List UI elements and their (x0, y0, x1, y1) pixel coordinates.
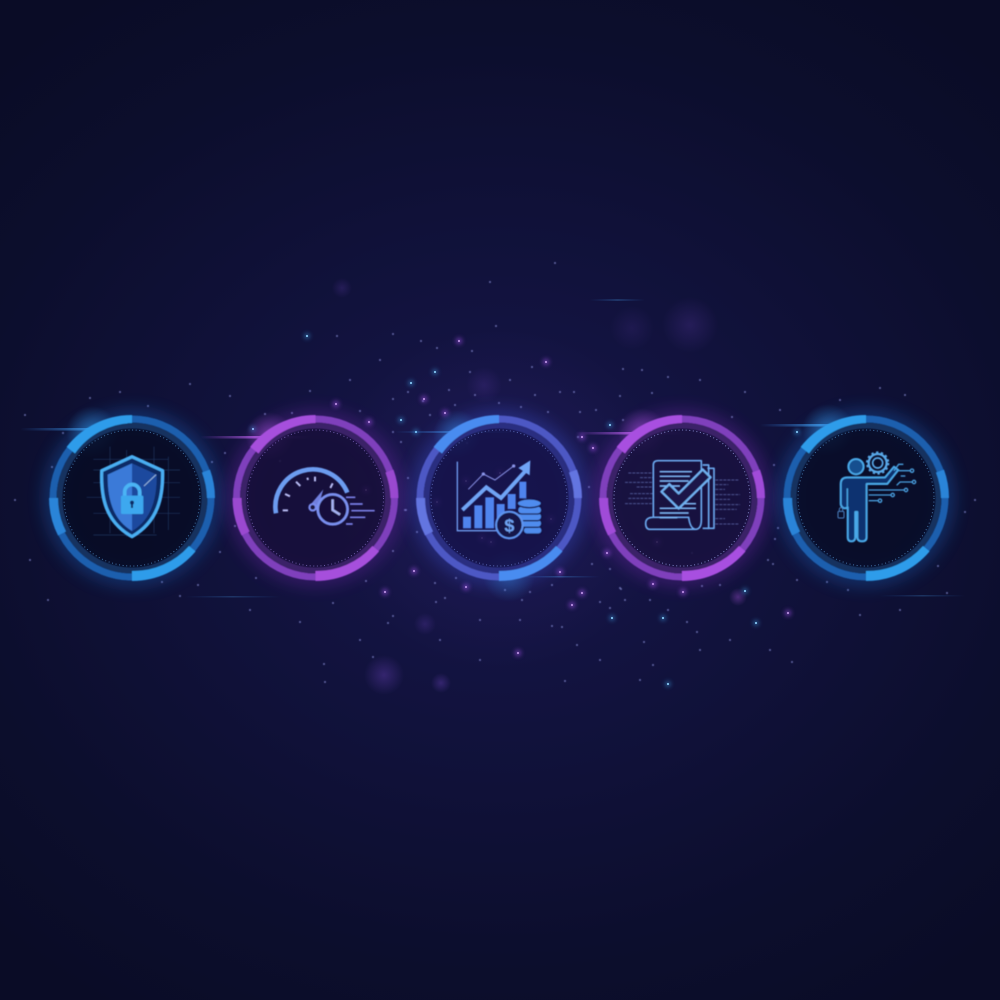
badge 1: security ring (49, 406, 215, 581)
icon: shield with padlock (87, 447, 180, 537)
icon: growth chart with coins: $ (504, 515, 514, 535)
bokeh lights (330, 278, 747, 695)
light streaks (20, 299, 965, 598)
particle field (15, 263, 975, 684)
badge 5: human oversight ring (783, 404, 949, 581)
icon: growth chart with coins (457, 460, 542, 538)
icon: document with check mark (625, 461, 740, 529)
icon: speedometer with clock (275, 469, 375, 524)
badge 2: speed ring (232, 412, 398, 581)
icon: person with gear and circuits (838, 452, 916, 541)
badge 4: compliance ring (599, 408, 765, 581)
badge 3: finance ring (416, 410, 582, 602)
